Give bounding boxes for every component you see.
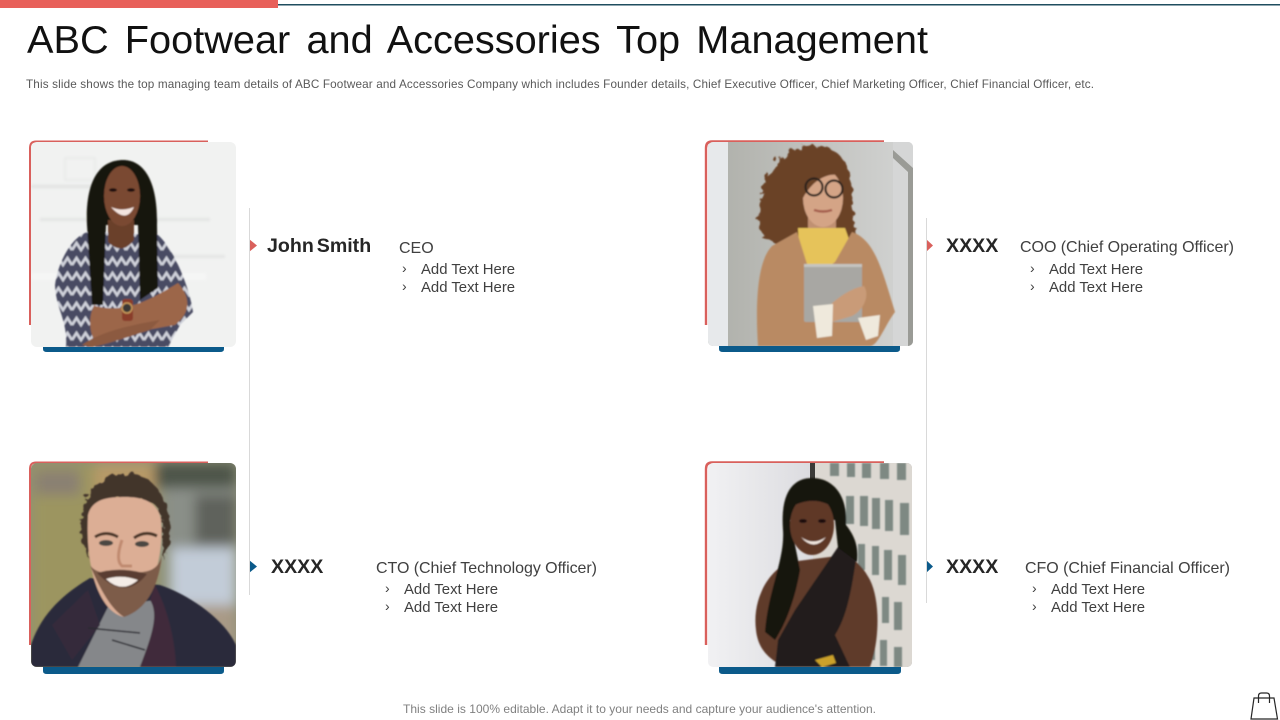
blue base bar bbox=[43, 347, 224, 352]
name: John Smith bbox=[267, 235, 371, 257]
top accent bar bbox=[0, 0, 1280, 8]
role: CFO (Chief Financial Officer) bbox=[1025, 560, 1230, 577]
panel: CTO bbox=[30, 462, 597, 674]
panel: CFO bbox=[706, 462, 1230, 674]
description: This slide shows the top managing team details of ABC Footwear and Accessories Company which includes Founder details, Chief Executive Officer, Chief Marketing Officer, Chief Financial Officer, etc. bbox=[26, 78, 1094, 91]
photo: woman with braids in patterned dress bbox=[31, 142, 236, 347]
bullets: Add Text Here bbox=[421, 280, 515, 296]
footer note: This slide is 100% editable. Adapt it to your needs and capture your audience's attention. bbox=[403, 702, 876, 716]
role: CTO (Chief Technology Officer) bbox=[376, 560, 597, 577]
bullets: Add Text Here bbox=[1051, 582, 1145, 598]
bullets bbox=[1032, 580, 1145, 616]
blue base bar bbox=[43, 667, 224, 674]
name: XXXX bbox=[271, 556, 323, 578]
bullets: › bbox=[402, 260, 407, 276]
photo frame: CTO bbox=[30, 462, 208, 645]
marker arrow bbox=[926, 560, 933, 573]
photo frame: COO bbox=[706, 142, 884, 325]
bullets: › bbox=[1030, 260, 1035, 276]
bullets: Add Text Here bbox=[1049, 280, 1143, 296]
panel: John Smith CEO bbox=[30, 142, 515, 352]
bullets: › bbox=[385, 580, 390, 596]
role: COO (Chief Operating Officer) bbox=[1020, 239, 1234, 256]
photo frame: CEO bbox=[30, 142, 208, 325]
bullets: › bbox=[1032, 580, 1037, 596]
photo: smiling woman by window bbox=[708, 463, 912, 667]
photo: woman with glasses holding laptop bbox=[708, 142, 913, 346]
icon: shopping bag bbox=[1251, 693, 1278, 719]
blue base bar bbox=[719, 346, 900, 352]
bullets: › bbox=[1030, 278, 1035, 294]
bullets bbox=[402, 260, 515, 296]
name: XXXX bbox=[946, 556, 998, 578]
photo frame: CFO bbox=[706, 462, 884, 645]
bullets: Add Text Here bbox=[1049, 262, 1143, 278]
bullets: › bbox=[402, 278, 407, 294]
marker arrow bbox=[926, 239, 933, 252]
bullets: Add Text Here bbox=[1051, 600, 1145, 616]
panel: COO bbox=[706, 142, 1234, 352]
title: ABC Footwear and Accessories Top Management bbox=[27, 19, 928, 62]
name: XXXX bbox=[946, 235, 998, 257]
marker arrow bbox=[249, 239, 257, 252]
marker arrow bbox=[249, 560, 257, 573]
bullets: › bbox=[385, 598, 390, 614]
bullets: Add Text Here bbox=[404, 600, 498, 616]
role: CEO bbox=[399, 240, 434, 257]
blue base bar bbox=[719, 667, 901, 674]
bullets: › bbox=[1032, 598, 1037, 614]
bullets bbox=[385, 580, 498, 616]
bullets: Add Text Here bbox=[421, 262, 515, 278]
bullets bbox=[1030, 260, 1143, 296]
photo: smiling bearded man bbox=[31, 463, 236, 667]
bullets: Add Text Here bbox=[404, 582, 498, 598]
